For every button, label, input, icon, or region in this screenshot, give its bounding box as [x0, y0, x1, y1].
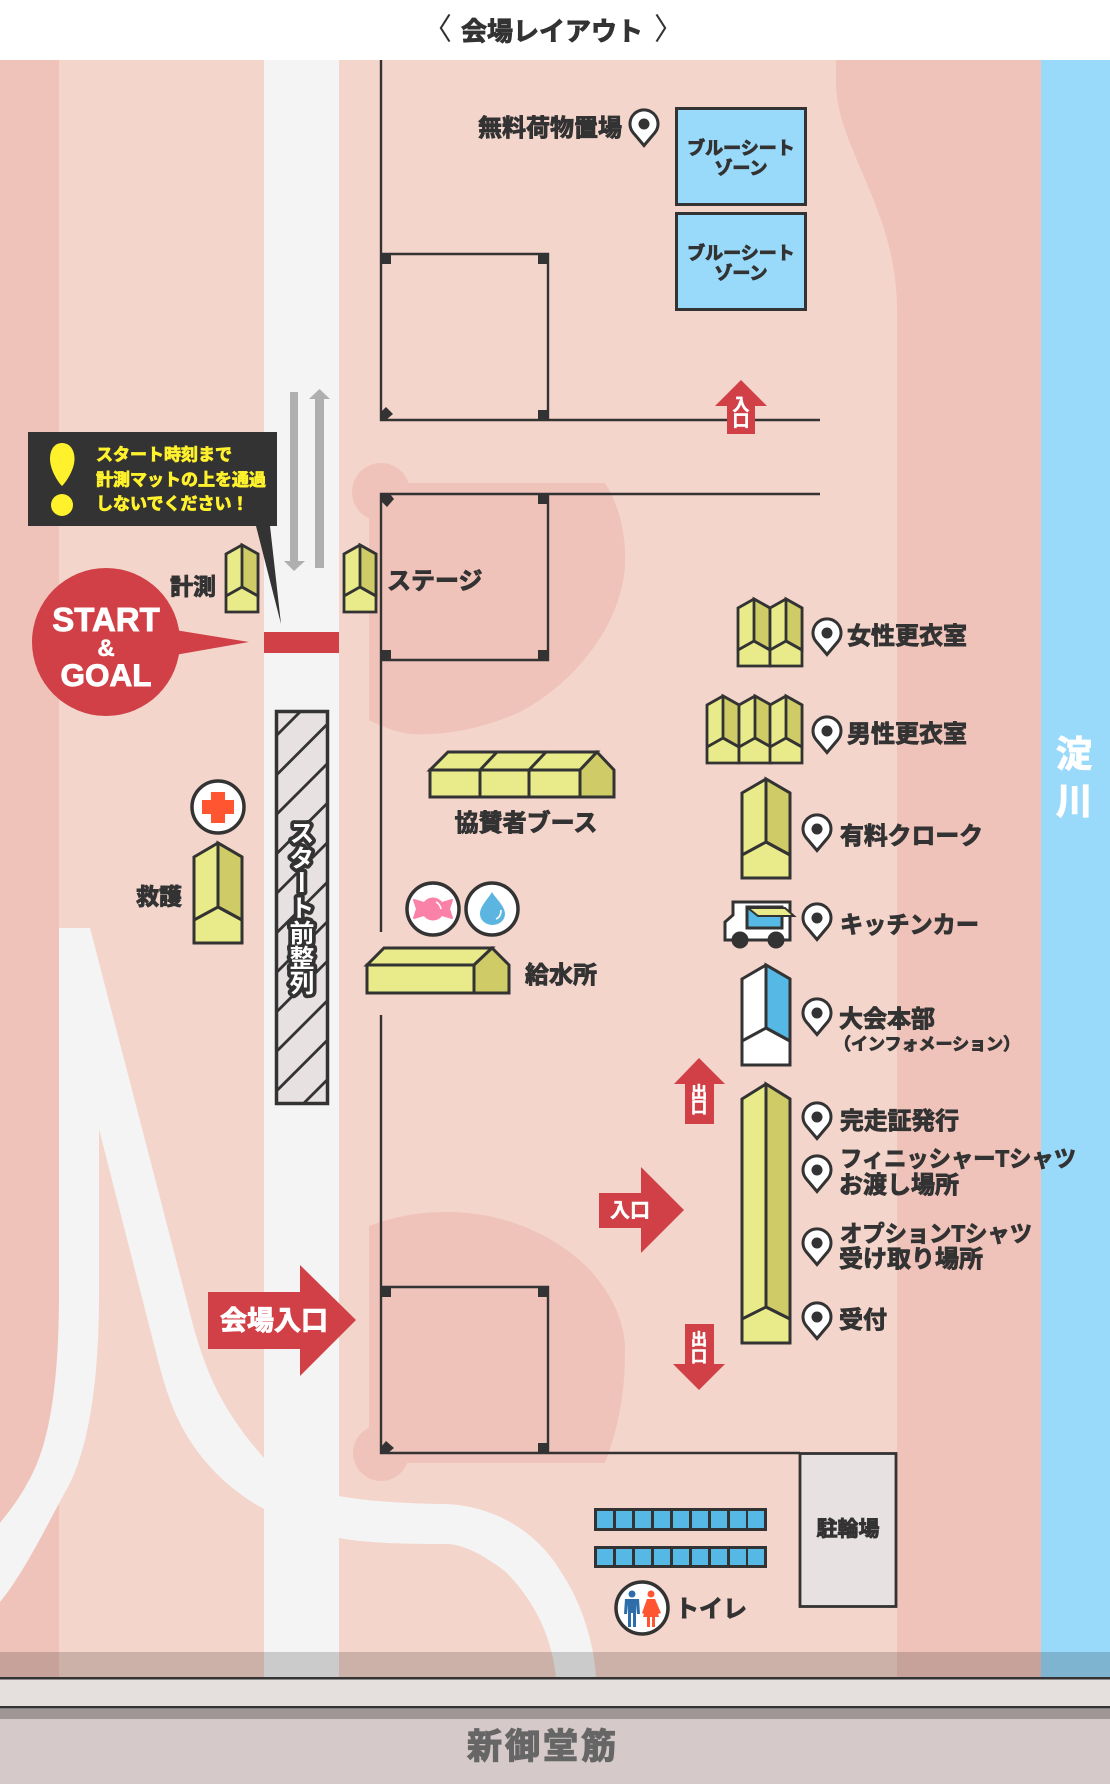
label: finisher shirt: お渡し場所 — [839, 1172, 959, 1199]
label: first aid: 救護 — [136, 884, 182, 910]
callout: timing notice: スタート時刻まで — [96, 446, 232, 464]
icon: pin finisher shirt — [803, 1156, 831, 1192]
blue sheet zone 1: ゾーン — [714, 158, 768, 178]
icon: pin certificate — [803, 1103, 831, 1138]
arrow: entrance right — [599, 1167, 684, 1253]
callout: timing notice: 計測マットの上を通過 — [96, 470, 266, 490]
tent: stage side — [344, 545, 376, 612]
label: headquarters — [834, 1006, 1020, 1054]
arrow: exit up: 口 — [691, 1099, 707, 1117]
arrow: exit down — [673, 1324, 725, 1390]
icon: toilet — [616, 1582, 668, 1634]
label: headquarters: 大会本部 — [839, 1006, 935, 1033]
label: kitchen car: キッチンカー — [840, 912, 979, 939]
start and goal badge — [32, 568, 249, 716]
blue sheet zone 1 — [676, 108, 806, 204]
start and goal badge: & — [97, 635, 115, 662]
bicycle parking: 駐輪場 — [816, 1518, 880, 1541]
bicycle parking — [800, 1454, 896, 1606]
tent: water station — [367, 948, 509, 993]
arrow: entrance up — [715, 380, 767, 434]
icon: pin baggage — [630, 110, 658, 146]
icon: pin kitchen car — [803, 904, 831, 940]
arrow: exit up: 出 — [691, 1083, 707, 1102]
start line — [264, 632, 339, 653]
corner markers — [381, 254, 548, 1453]
tent: cloakroom — [742, 779, 790, 878]
sponsor booth — [430, 752, 614, 797]
blue sheet zone 2 — [676, 214, 806, 310]
label: stage: ステージ — [387, 568, 483, 595]
title: 〉 — [654, 14, 684, 46]
main road — [264, 60, 339, 1678]
bottom road bands — [0, 1652, 1110, 1784]
start and goal badge: START — [52, 601, 160, 638]
label: water station: 給水所 — [525, 962, 597, 989]
tent: women's changing room — [738, 599, 802, 666]
start and goal badge: GOAL — [60, 657, 152, 693]
tent: men's changing room — [707, 696, 802, 763]
label: cloakroom: 有料クローク — [840, 823, 983, 850]
arrow: venue entrance — [208, 1265, 356, 1376]
tent: timing — [226, 545, 258, 612]
stage area highlight lower — [353, 1212, 625, 1481]
blue sheet zone 2: ゾーン — [714, 264, 768, 284]
icon: pin headquarters — [803, 999, 831, 1034]
arrow: gray down — [284, 392, 305, 571]
icon: pin men — [813, 717, 841, 752]
label: finisher shirt — [839, 1146, 1076, 1199]
arrow: entrance right: 入口 — [610, 1200, 650, 1222]
title — [422, 14, 684, 46]
stage area highlight upper — [352, 463, 625, 734]
street label: 新御堂筋 — [467, 1728, 619, 1766]
icon: pin women — [813, 619, 841, 654]
icon: candy — [407, 883, 459, 935]
arrow: entrance up: 口 — [732, 412, 750, 430]
label: headquarters: （インフォメーション） — [834, 1035, 1020, 1054]
icon: exclamation — [50, 443, 74, 516]
label: certificate: 完走証発行 — [840, 1108, 959, 1135]
title: 会場レイアウト — [461, 16, 643, 46]
icon: pin cloakroom — [803, 815, 831, 850]
icon: pin option shirt — [803, 1229, 831, 1264]
callout: timing notice — [28, 432, 281, 624]
icon: first aid — [192, 781, 244, 833]
label: reception: 受付 — [839, 1307, 887, 1334]
tent: long reception — [742, 1084, 790, 1343]
river label: 川 — [1056, 780, 1092, 822]
toilets row 1 — [594, 1508, 767, 1531]
icon: pin reception — [803, 1303, 831, 1338]
icon: kitchen car — [725, 902, 794, 947]
toilets row 2 — [594, 1546, 767, 1568]
label: sponsor booth: 協賛者ブース — [455, 809, 597, 837]
arrow: exit down: 出 — [691, 1330, 707, 1349]
arrow: venue entrance: 会場入口 — [220, 1306, 328, 1336]
label: men's changing room: 男性更衣室 — [847, 721, 967, 748]
river label — [1056, 734, 1092, 822]
label: toilet: トイレ — [675, 1596, 747, 1623]
arrow: exit down: 口 — [691, 1348, 707, 1366]
icon: water drop — [466, 883, 518, 935]
pre-start queue zone — [276, 684, 328, 1131]
label: option shirt — [839, 1220, 1032, 1273]
curved road left — [0, 928, 264, 1602]
venue lines — [381, 60, 820, 1453]
label: free baggage storage: 無料荷物置場 — [478, 115, 622, 142]
arrow: exit up — [674, 1058, 725, 1124]
tent: headquarters — [742, 965, 790, 1065]
tent: first aid — [194, 843, 242, 943]
label: women's changing room: 女性更衣室 — [847, 623, 967, 650]
river label: 淀 — [1056, 734, 1092, 774]
label: finisher shirt: フィニッシャーTシャツ — [840, 1146, 1076, 1172]
pre-start queue zone: スタート前整列 — [286, 820, 314, 996]
blue sheet zone 1: ブルーシート — [687, 138, 795, 158]
curved road right — [339, 1496, 596, 1678]
label: option shirt: 受け取り場所 — [839, 1246, 983, 1273]
label: option shirt: オプションTシャツ — [840, 1220, 1032, 1246]
callout: timing notice: しないでください！ — [96, 494, 248, 514]
arrow: gray up — [309, 389, 330, 568]
arrow: entrance up: 入 — [732, 396, 750, 414]
label: timing: 計測 — [170, 574, 216, 600]
header bar — [0, 0, 1110, 60]
title: 〈 — [422, 14, 452, 46]
blue sheet zone 2: ブルーシート — [687, 242, 795, 264]
